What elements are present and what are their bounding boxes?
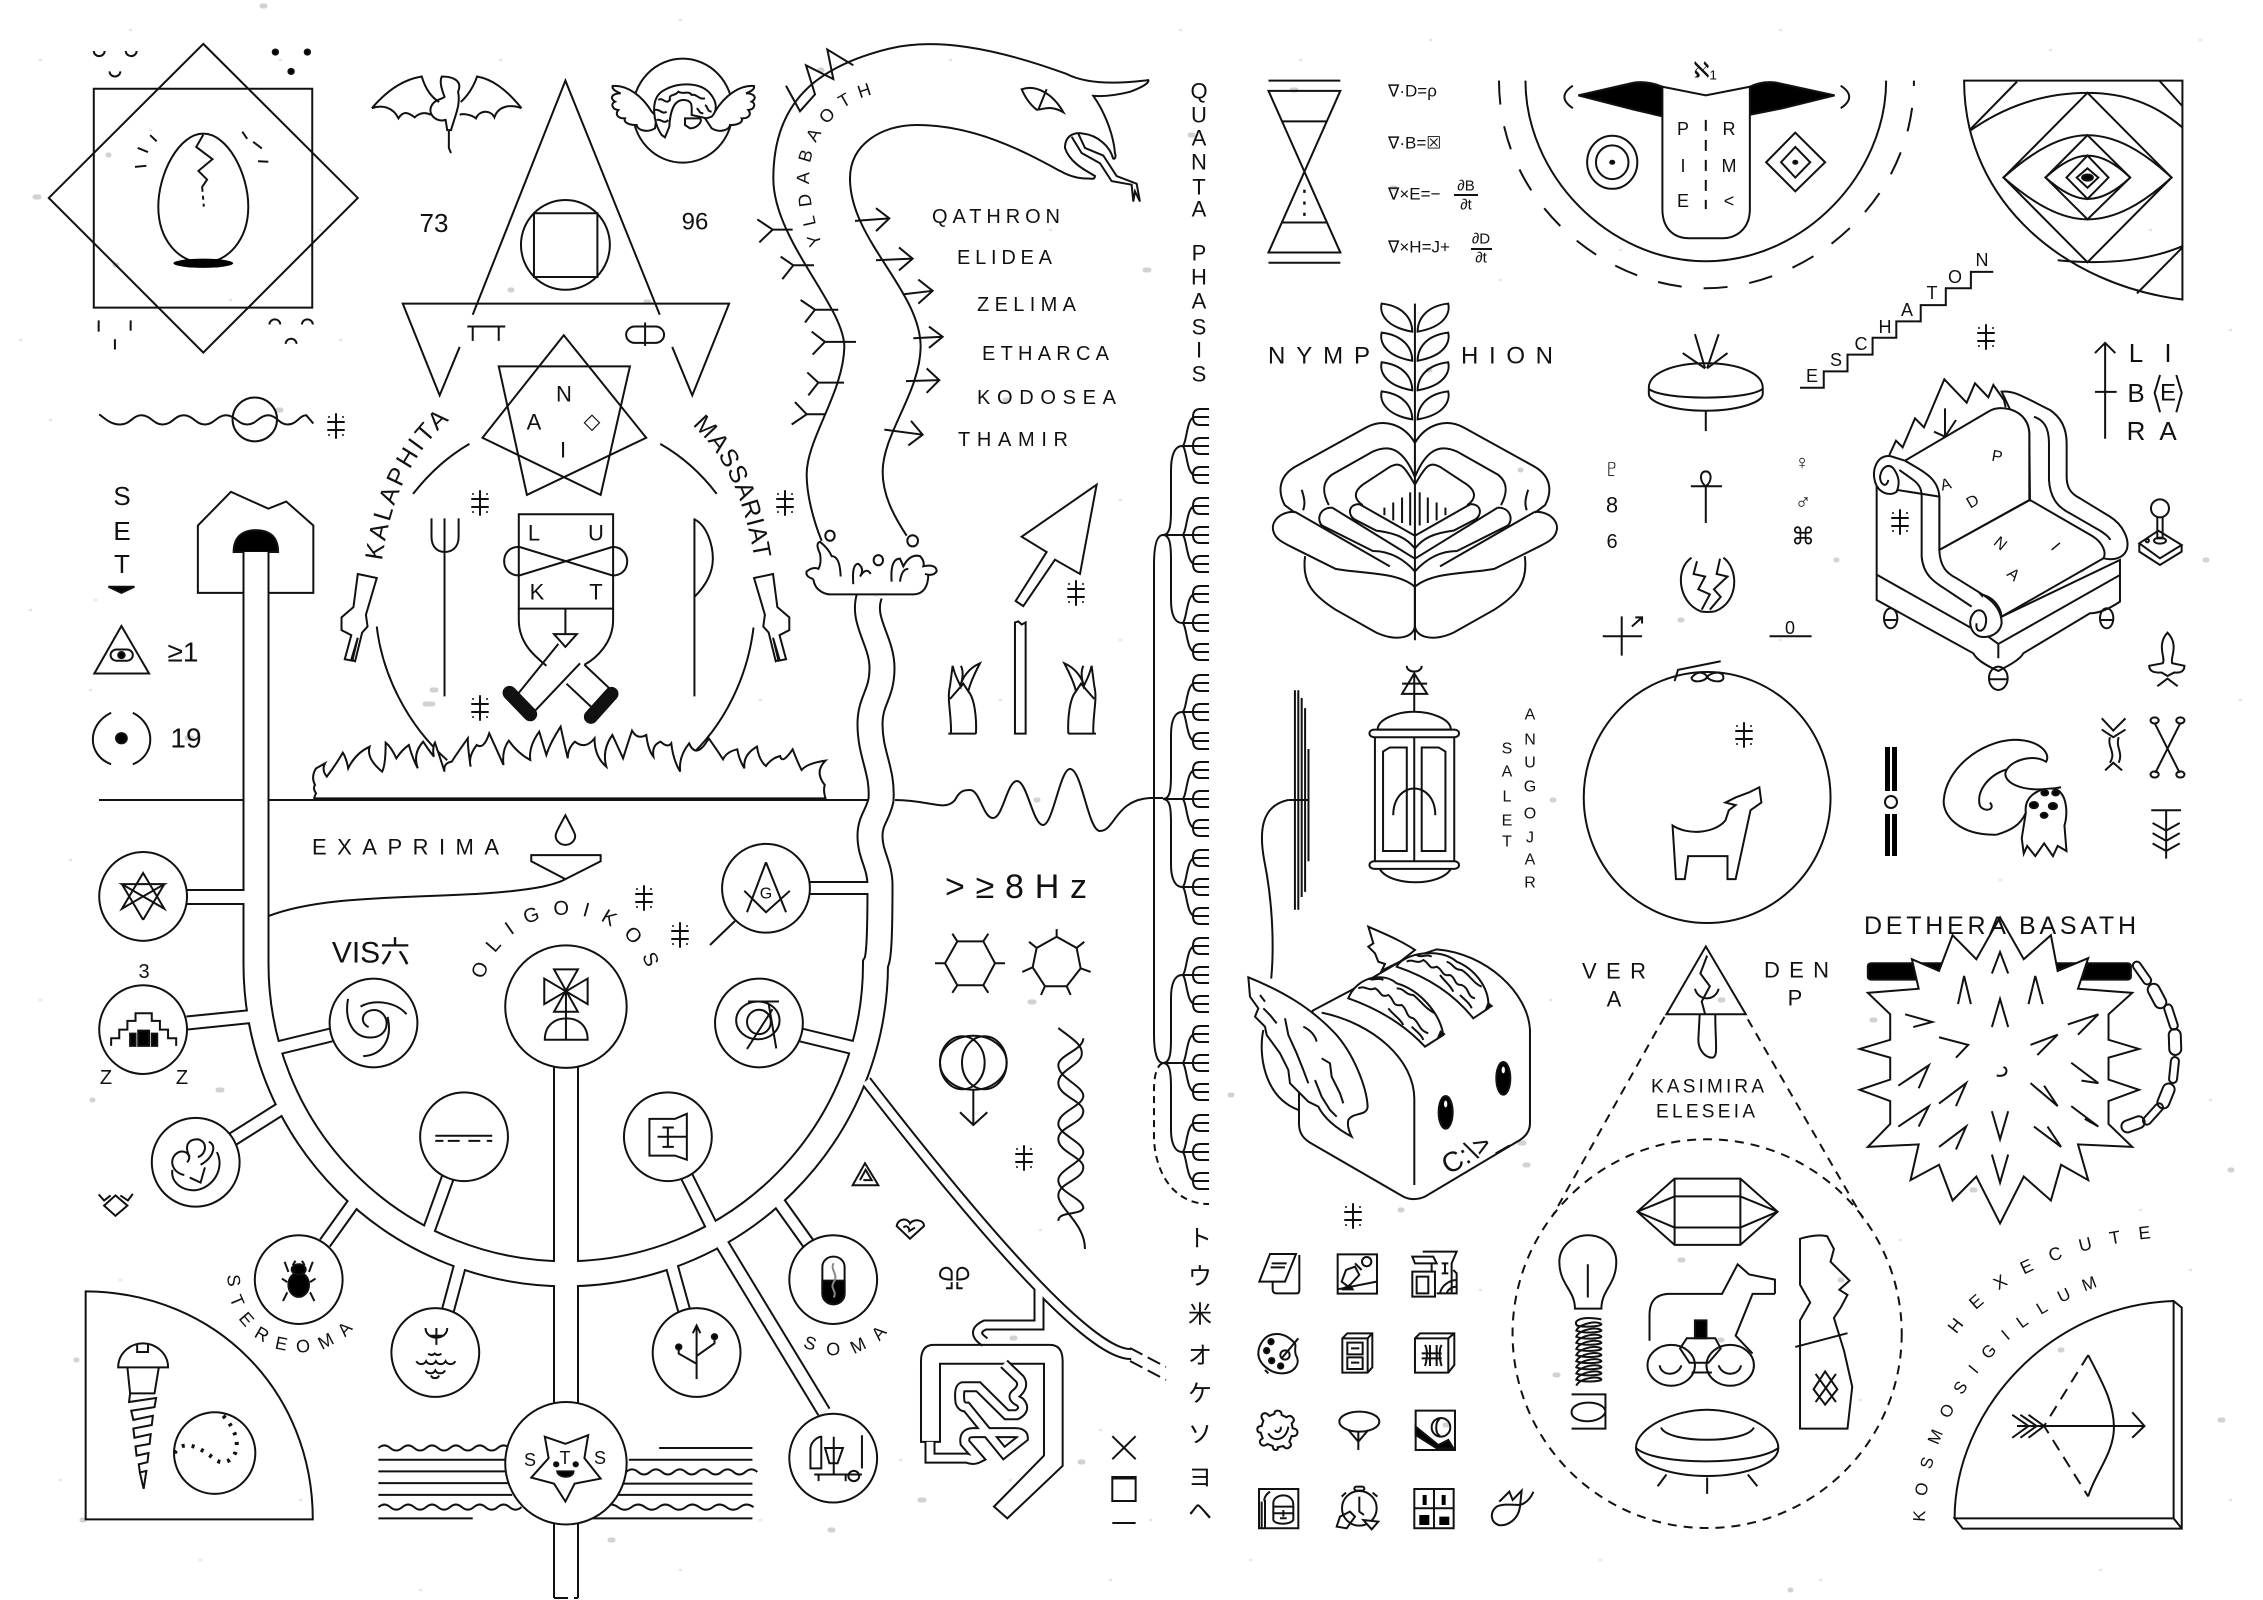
labels: right page text: B — [2127, 378, 2145, 408]
labels: right page text: VER — [1582, 958, 1646, 984]
brain slice front — [1348, 977, 1444, 1047]
labels: right page text: SALET — [1502, 740, 1513, 850]
labels: right page text: 8 — [1606, 492, 1618, 518]
labels: left page text: KALAPHITA — [365, 412, 450, 559]
labels: right page text: KOSMOSIGILLUM — [1913, 1276, 2096, 1521]
icon: spinning top — [1649, 334, 1763, 431]
labels: right page text: ♇ — [1602, 453, 1622, 483]
panel: tongue semicircle — [1499, 81, 1914, 288]
lamp with curve — [268, 815, 601, 916]
icon: comb and wire — [1262, 690, 1308, 979]
emblem: tangled circles — [715, 979, 803, 1067]
panel: right page lower symbols — [1262, 661, 2182, 1529]
labels: left page text: S — [594, 1448, 606, 1468]
icon: quartered hearts — [940, 1268, 968, 1288]
panel: isometric armchair — [1874, 379, 2127, 690]
right wing — [705, 86, 755, 131]
labels: Maxwell equations: ∂B — [1457, 178, 1475, 194]
labels: right page text: R — [1722, 119, 1736, 139]
icon: moai — [1795, 1235, 1852, 1429]
icon: cabinet — [1342, 1333, 1372, 1373]
emblem: spiral galaxy — [330, 979, 417, 1067]
panel: goat in circle — [1584, 661, 1831, 923]
labels: right page text: I — [2047, 540, 2063, 554]
left half of flower — [1273, 304, 1415, 638]
labels: right page text: A — [2003, 565, 2023, 585]
labels: right page text: ♂ — [1795, 490, 1811, 514]
chair feet — [1884, 608, 1897, 628]
panel: eye in quarter — [1964, 81, 2183, 299]
icon: crossed pins — [2151, 717, 2184, 778]
panel: quarter with screw and baseball — [86, 1291, 313, 1519]
labels: Maxwell equations: ∂t — [1460, 196, 1473, 214]
icon: trojan horse — [1647, 1264, 1775, 1386]
icon: nautilus with tentacles — [1944, 740, 2066, 856]
emblem: mason square and compass — [722, 844, 810, 933]
labels: left page text: 19 — [170, 722, 202, 754]
labels: Maxwell equations: ∂D — [1472, 230, 1490, 248]
icon: machine block — [1412, 1252, 1457, 1297]
labels: right page text: NYMP — [1268, 342, 1370, 370]
emblem: scarab beetle — [255, 1235, 343, 1324]
icon: right hand — [754, 574, 789, 661]
tree of leaves — [1150, 409, 1209, 1204]
labels: right page text: C:\>_ — [1436, 1119, 1510, 1180]
labels: serpent and central text: QATHRON — [932, 206, 1060, 228]
panel: circled emblems on the pipe network — [99, 844, 877, 1524]
labels: left page text: U — [588, 520, 604, 546]
labels: serpent and central text: QUANTA PHASIS — [1190, 78, 1208, 386]
labels: right page text: ♀ — [1794, 452, 1810, 474]
icon: alarm clock — [1337, 1487, 1378, 1529]
labels: right page text: E — [1806, 366, 1818, 386]
icon: chess grid — [1414, 1489, 1454, 1528]
emblem: star face — [505, 1402, 627, 1524]
icon: ankh — [1691, 471, 1722, 523]
mason tail line — [710, 921, 735, 945]
panel: hat triangle with circled square — [403, 81, 729, 395]
brain — [654, 84, 716, 137]
labels: left page text: Z — [100, 1067, 112, 1089]
icon: balloon — [1339, 1412, 1379, 1450]
labels: right page text: M — [1722, 156, 1736, 176]
labels: right page text: H — [1878, 317, 1892, 337]
labels: right page text: I — [2164, 338, 2172, 368]
panel: lantern — [1370, 666, 1459, 882]
labels: left page text: 73 — [420, 208, 448, 238]
panel: bow in quarter slab — [1955, 1301, 2182, 1529]
panel: spiked mace — [1860, 917, 2139, 1223]
labels: serpent and central text: >≥8Hz — [945, 868, 1087, 906]
icon: vesica with arrow — [940, 1036, 1007, 1125]
DNA helix — [1058, 1028, 1085, 1249]
labels: right page text — [1268, 58, 2177, 1521]
labels: left page text: 3 — [138, 961, 150, 983]
panel: lower left water and screw quarter — [86, 815, 757, 1519]
toaster wing back lobe — [1262, 1030, 1298, 1110]
labels: Maxwell equations: ∇×H=J+ — [1387, 238, 1450, 256]
toaster eyes — [1439, 1062, 1510, 1129]
icon: digestive tract — [921, 1345, 1063, 1518]
icon: spiral heart — [897, 1220, 924, 1239]
icon: rune column — [2102, 718, 2125, 770]
emblem: machine wheel — [789, 1414, 877, 1503]
icon: cracked triangle with hand — [1666, 946, 1746, 1058]
icon: hourglass — [1268, 81, 1340, 263]
labels: Maxwell equations: ∇×E=− — [1387, 184, 1441, 204]
labels: left page text: T — [560, 1448, 570, 1468]
labels: left page text: A — [527, 410, 542, 434]
icon: bat dragon — [372, 77, 522, 153]
toaster rear wing — [1368, 927, 1415, 971]
panel: dashed teardrop with artefacts — [1513, 946, 1902, 1528]
labels: right page text: E — [2160, 380, 2176, 406]
labels: right page text: DEN — [1764, 958, 1829, 982]
chair right arm and back — [2002, 391, 2127, 559]
water lines — [378, 1445, 757, 1518]
labels: right page text: L — [2129, 338, 2143, 368]
labels: right page text: 0 — [1785, 618, 1795, 638]
labels: right page text: KASIMIRA — [1651, 1076, 1764, 1098]
labels: left page text: N — [556, 382, 572, 406]
labels: left page text: VIS六 — [332, 936, 410, 970]
icon: picture with eraser — [1338, 1254, 1377, 1294]
labels: left page text: SOMA — [804, 1328, 888, 1356]
brain slice rear — [1397, 953, 1492, 1018]
labels: right page text: I — [1680, 156, 1686, 176]
labels: right page text: P — [1788, 986, 1802, 1010]
labels: right page text: S — [1830, 350, 1842, 370]
labels: right page text: N — [1990, 534, 2010, 554]
labels: left page text: ≥1 — [168, 636, 198, 668]
labels: left page text: G — [760, 886, 772, 902]
labels: right page text: P — [1677, 119, 1689, 139]
panel: plant and flower in hands — [1273, 304, 1557, 640]
labels: right page text: ℵ₁ — [1693, 58, 1717, 82]
serpent body — [773, 44, 1148, 541]
icon: heptagon — [1022, 929, 1091, 995]
black bars with ring — [1885, 747, 1897, 856]
labels: Maxwell equations: ∇·D=ρ — [1387, 82, 1437, 100]
left arm roll — [1874, 456, 1899, 494]
icon: gear — [1257, 1411, 1297, 1450]
serpent right arrows — [855, 208, 943, 445]
labels: right page text: A — [1607, 986, 1622, 1012]
oscillating wave — [895, 769, 1150, 831]
labels: left page text: STEREOMA — [227, 1276, 354, 1352]
icon: bulb on spring — [1559, 1235, 1616, 1429]
labels: right page text: A — [1939, 475, 1954, 495]
icon: cracked shell — [1681, 558, 1734, 612]
icon: arrow and brackets — [2095, 343, 2182, 439]
emblem: bracket box — [624, 1092, 712, 1181]
labels: right page text: D — [1964, 492, 1982, 512]
labels: right page text: R — [2127, 416, 2145, 446]
labels: left page text: ◇ — [584, 408, 601, 434]
labels: right page text: HION — [1461, 342, 1553, 370]
icon: palette — [1258, 1334, 1298, 1373]
panel: right page upper symbols — [1268, 81, 2184, 778]
labels: left page text: OLIGOIKOS — [472, 900, 658, 977]
icon: hexagon — [935, 934, 1005, 993]
splash basin — [806, 531, 937, 594]
labels: right page text: A — [1901, 300, 1913, 320]
flame tuft right — [1064, 663, 1096, 734]
labels: right page text: O — [1948, 267, 1962, 287]
labels: serpent and central text: トウ米オケソヨヘ — [1188, 1226, 1212, 1526]
icon: spiral triangle — [853, 1163, 878, 1185]
icon: crystal — [1637, 1179, 1778, 1245]
labels: serpent and central text: ELIDEA — [957, 247, 1053, 269]
horizon line — [99, 799, 880, 801]
icon: owl cave diamond — [99, 1194, 133, 1216]
labels: left page text: MASSARIAT — [694, 414, 772, 556]
panel: cracked egg in square and diamond — [49, 44, 358, 353]
sigil marks — [328, 325, 1994, 1228]
wave through circle — [99, 397, 313, 441]
icon: dot in parentheses — [93, 587, 150, 764]
labels: left page text: L — [528, 520, 540, 546]
labels: left page text: 96 — [682, 208, 708, 236]
emblem: dotted lines — [420, 1092, 508, 1181]
labels: right page text: C — [1854, 334, 1868, 354]
labels: right page text: T — [1926, 283, 1938, 303]
pillar with broken top — [1015, 621, 1026, 734]
labels: serpent and central text — [796, 78, 1212, 1526]
panel: icon grid — [1257, 1252, 1533, 1529]
icon: feather arrow — [2151, 810, 2181, 859]
flame tuft left — [948, 663, 980, 734]
emblem: USB trident — [653, 1308, 741, 1397]
labels: right page text: HEXECUTE — [1948, 1226, 2150, 1334]
grass flames — [313, 727, 826, 798]
toaster front wing — [1248, 977, 1368, 1137]
labels: left page text: I — [560, 438, 566, 462]
labels: left page text: EXAPRIMA — [312, 834, 499, 860]
front arm roll — [1970, 595, 2002, 637]
pipe system: interior — [143, 552, 1131, 1598]
icon: flame drop — [1492, 1491, 1533, 1525]
pipe system: casing — [143, 552, 1131, 1598]
labels: right page text: ANUGOJAR — [1524, 706, 1536, 892]
labels: right page text: P — [1990, 448, 2004, 466]
icon: portrait — [1259, 1489, 1298, 1528]
labels: left page text: Z — [176, 1067, 188, 1089]
labels: left page text: T — [589, 580, 603, 604]
emblem: soma capsule — [789, 1235, 877, 1324]
emblem: stepped pyramid — [99, 985, 187, 1074]
chair flames and arrow — [1889, 379, 2006, 455]
labels: left page text: S — [524, 1450, 536, 1470]
emblem: hexagram — [99, 852, 187, 941]
labels: left page text: K — [530, 580, 545, 604]
icon: eye triangle — [94, 626, 149, 673]
pipe bottom cap and dashed continuation — [554, 1348, 1166, 1598]
chain links — [2120, 960, 2181, 1134]
labels: right page text: ELESEIA — [1656, 1102, 1755, 1122]
labels: serpent and central text: ZELIMA — [977, 294, 1077, 316]
icon: temple with dome — [198, 492, 313, 593]
panel: serpent Yldabaoth — [757, 44, 1148, 734]
labels: Maxwell equations: ∇·B=☒ — [1387, 134, 1442, 152]
labels: right page text: ⌘ — [1791, 524, 1815, 550]
icon: X window and bar — [1112, 1436, 1136, 1523]
panel: heptagram — [482, 335, 646, 495]
right half of flower — [1415, 304, 1557, 638]
cross and line marks — [1603, 616, 1812, 656]
big cursor arrow — [1016, 485, 1097, 606]
icon: joystick — [2139, 499, 2182, 565]
chair base and seat — [1877, 487, 2120, 671]
icon: UFO — [1636, 1410, 1778, 1494]
labels: right page text: 6 — [1606, 531, 1618, 553]
emblem: triskelion dragon — [152, 1118, 240, 1207]
labels: serpent and central text: THAMIR — [958, 429, 1068, 451]
icon: fleur sword — [2149, 633, 2184, 686]
icon: winged brain in circle — [612, 59, 755, 163]
panel: frequency column symbols — [853, 929, 1136, 1523]
icon: notepad — [1259, 1254, 1299, 1293]
serpent left branches — [757, 219, 856, 424]
panel: figure with arcs and tools — [377, 444, 754, 760]
toaster body — [1299, 949, 1530, 1199]
labels: right page text: N — [1976, 250, 1988, 270]
labels: left page text: SET — [113, 481, 131, 579]
labels: serpent and central text: YLDABAOTH — [796, 83, 871, 248]
icon: picture with moon — [1416, 1411, 1455, 1450]
labels: right page text: < — [1724, 191, 1734, 211]
labels: right page text: A — [2159, 416, 2177, 446]
labels: right page text: DETHERA BASATH — [1864, 912, 2136, 940]
panel: flying toaster — [1248, 927, 1530, 1199]
icon: cube with glyph — [1415, 1333, 1454, 1373]
labels: serpent and central text: KODOSEA — [977, 387, 1117, 409]
emblem: neptune and waves — [391, 1308, 479, 1397]
labels: Maxwell equations — [1387, 82, 1492, 266]
labels: serpent and central text: ETHARCA — [982, 343, 1110, 365]
stairs — [1800, 272, 1993, 388]
panel: upper left page symbols — [49, 44, 789, 764]
icon: left hand — [342, 574, 377, 661]
emblem: Oligoikos cross — [505, 945, 627, 1068]
left wing — [612, 86, 657, 131]
labels: right page text: E — [1677, 191, 1689, 211]
labels: Maxwell equations: ∂t — [1475, 250, 1488, 266]
